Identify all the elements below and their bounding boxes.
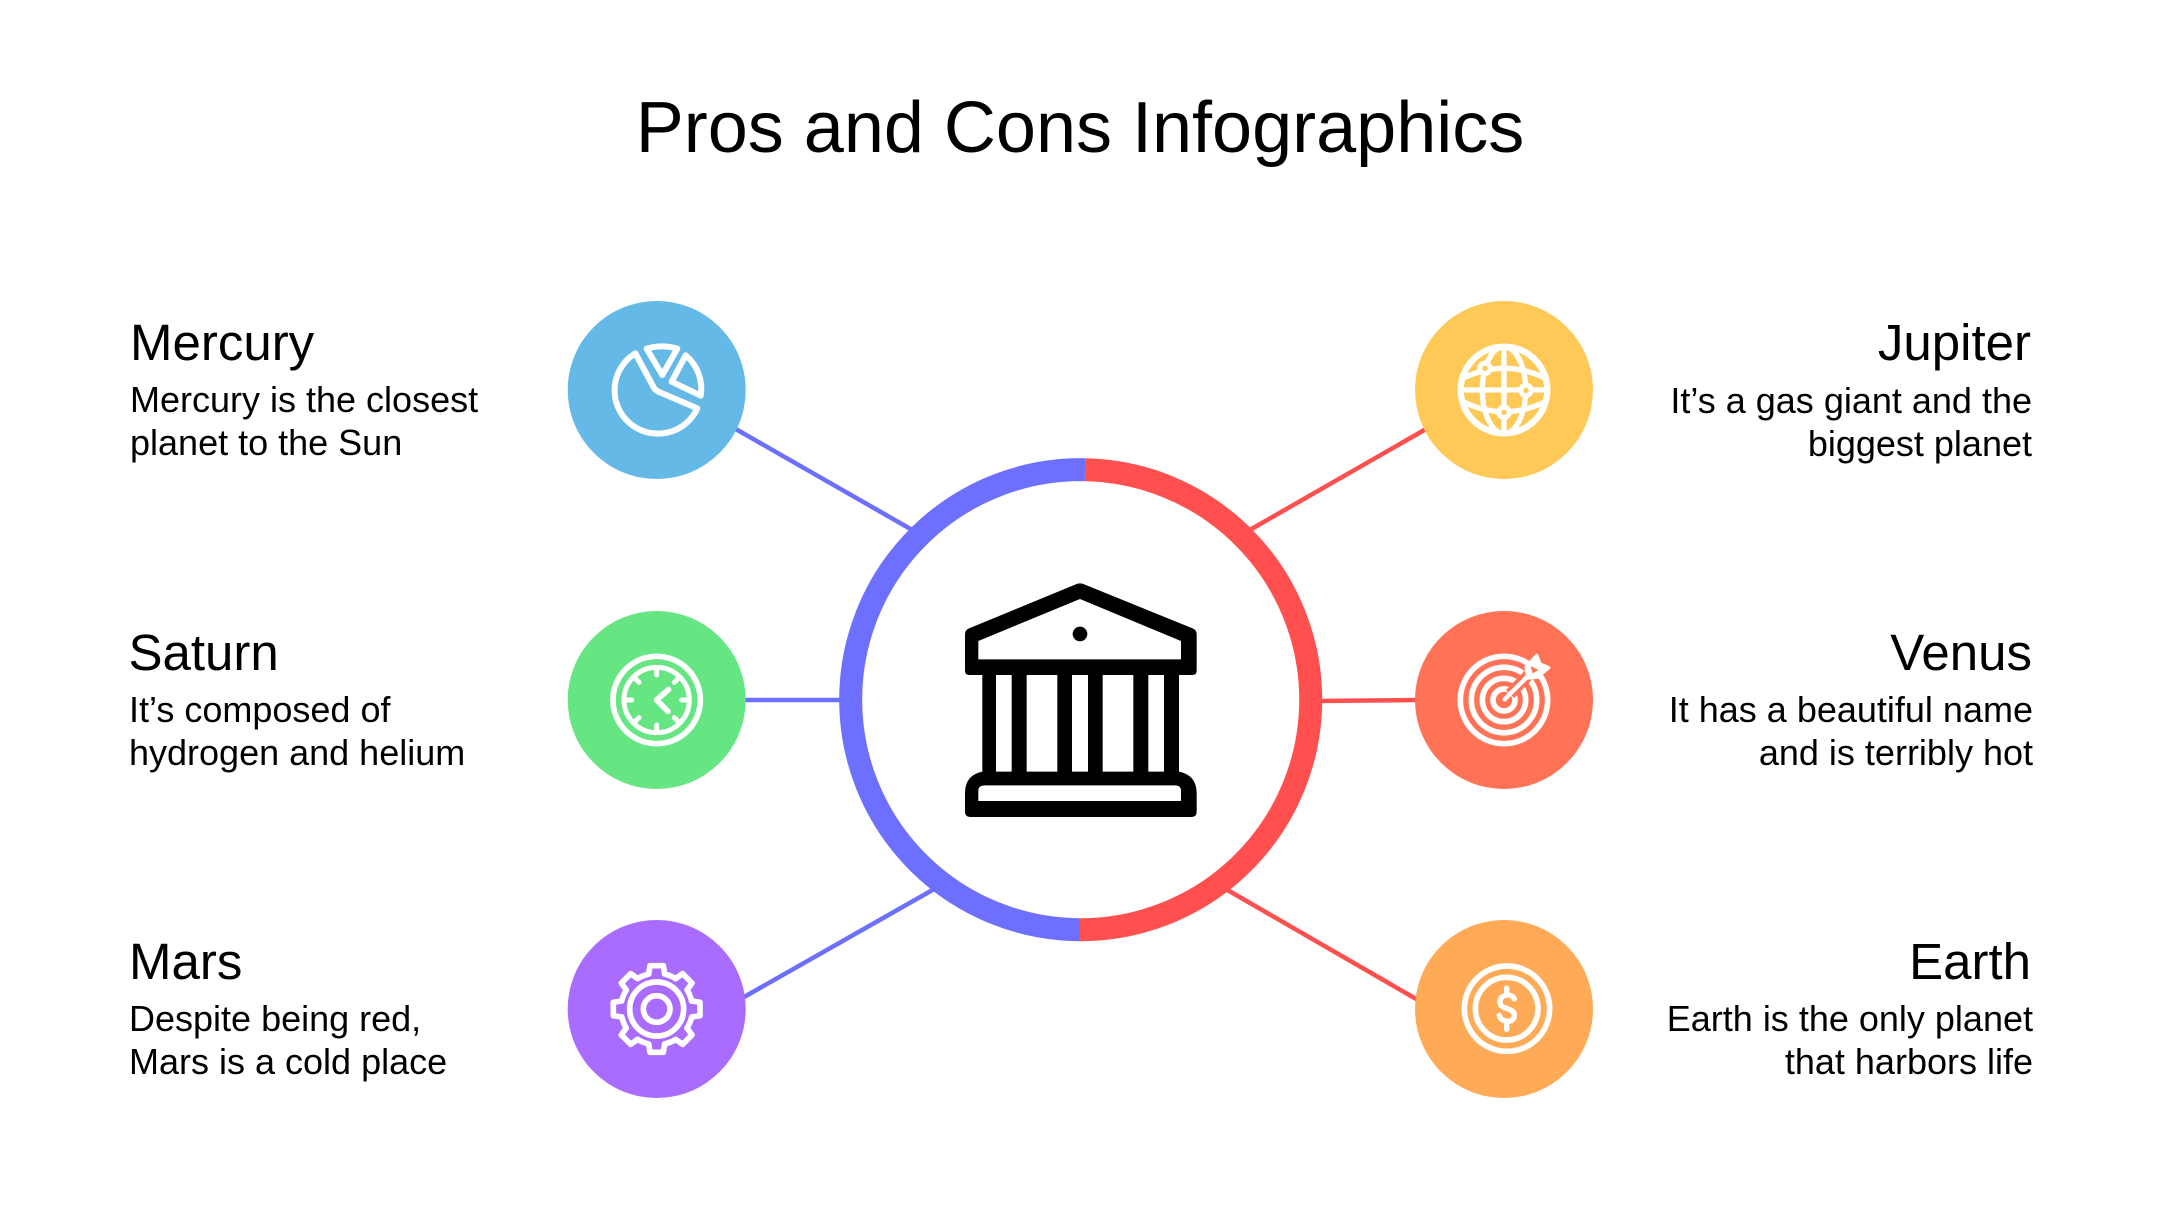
panel: Saturn bbox=[128, 611, 746, 789]
badge: Venus bbox=[1415, 611, 1593, 789]
text: Venus description: and is terribly hot bbox=[1759, 732, 2033, 773]
icon: gear bbox=[613, 965, 701, 1053]
text: Saturn description: hydrogen and helium bbox=[129, 732, 465, 773]
cons half of ring bbox=[1080, 470, 1311, 930]
connector lines bbox=[720, 420, 1440, 1007]
arrow: Venus connector bbox=[1316, 700, 1420, 701]
arrow fletching bbox=[1526, 655, 1549, 678]
text: Earth description: Earth is the only planet bbox=[1667, 998, 2033, 1039]
heading: Mercury: Mercury bbox=[130, 314, 315, 371]
icon: clock bbox=[613, 656, 700, 744]
icon: globe bbox=[1461, 347, 1547, 433]
panel: Earth bbox=[1415, 920, 2033, 1098]
panel: Venus bbox=[1415, 611, 2033, 789]
title: Pros and Cons Infographics bbox=[636, 88, 1524, 168]
arrow: Mercury connector bbox=[720, 420, 914, 531]
text: Mars description: Mars is a cold place bbox=[129, 1041, 447, 1082]
arrow: Jupiter connector bbox=[1248, 421, 1440, 531]
heading: Mars: Mars bbox=[129, 933, 242, 990]
panel: Mercury bbox=[130, 301, 746, 479]
panel: Jupiter bbox=[1415, 301, 2032, 479]
text: Saturn description: It’s composed of bbox=[129, 689, 391, 730]
icon: pie chart bbox=[615, 346, 701, 434]
arrow: Saturn connector bbox=[740, 698, 845, 702]
badge: Jupiter bbox=[1415, 301, 1593, 479]
badge: Saturn bbox=[568, 611, 746, 789]
badge: Earth bbox=[1415, 920, 1593, 1098]
heading: Saturn: Saturn bbox=[128, 624, 279, 681]
pros half of ring bbox=[851, 470, 1085, 930]
badge: Mercury bbox=[568, 301, 746, 479]
text: Venus description: It has a beautiful name bbox=[1669, 689, 2033, 730]
central ring bbox=[851, 470, 1311, 930]
pediment bbox=[965, 583, 1197, 675]
globe node holes bbox=[1482, 366, 1529, 415]
globe nodes bbox=[1477, 361, 1534, 420]
text: Mercury description: Mercury is the closest bbox=[130, 379, 478, 420]
text: Mercury description: planet to the Sun bbox=[130, 422, 402, 463]
heading: Venus: Venus bbox=[1890, 624, 2032, 681]
text: Jupiter description: biggest planet bbox=[1808, 423, 2032, 464]
badge: Mars bbox=[568, 920, 746, 1098]
arrow shaft bbox=[1505, 672, 1532, 699]
text: Mars description: Despite being red, bbox=[129, 998, 421, 1039]
icon: target with arrow bbox=[1460, 655, 1549, 744]
panel: Mars bbox=[129, 920, 746, 1098]
arrow: Earth connector bbox=[1224, 888, 1430, 1007]
columns bbox=[982, 673, 1179, 773]
text: Earth description: that harbors life bbox=[1785, 1041, 2033, 1082]
heading: Jupiter: Jupiter bbox=[1878, 314, 2031, 371]
icon: dollar coin bbox=[1464, 966, 1550, 1051]
heading: Earth: Earth bbox=[1909, 933, 2031, 990]
pediment dot bbox=[1073, 627, 1087, 641]
fletching notch bbox=[1531, 666, 1538, 673]
arrow gap bbox=[1510, 670, 1533, 694]
base bbox=[965, 772, 1197, 817]
arrow: Mars connector bbox=[730, 888, 936, 1005]
icon: bank building bbox=[965, 583, 1197, 817]
text: Jupiter description: It’s a gas giant and the bbox=[1670, 380, 2032, 421]
